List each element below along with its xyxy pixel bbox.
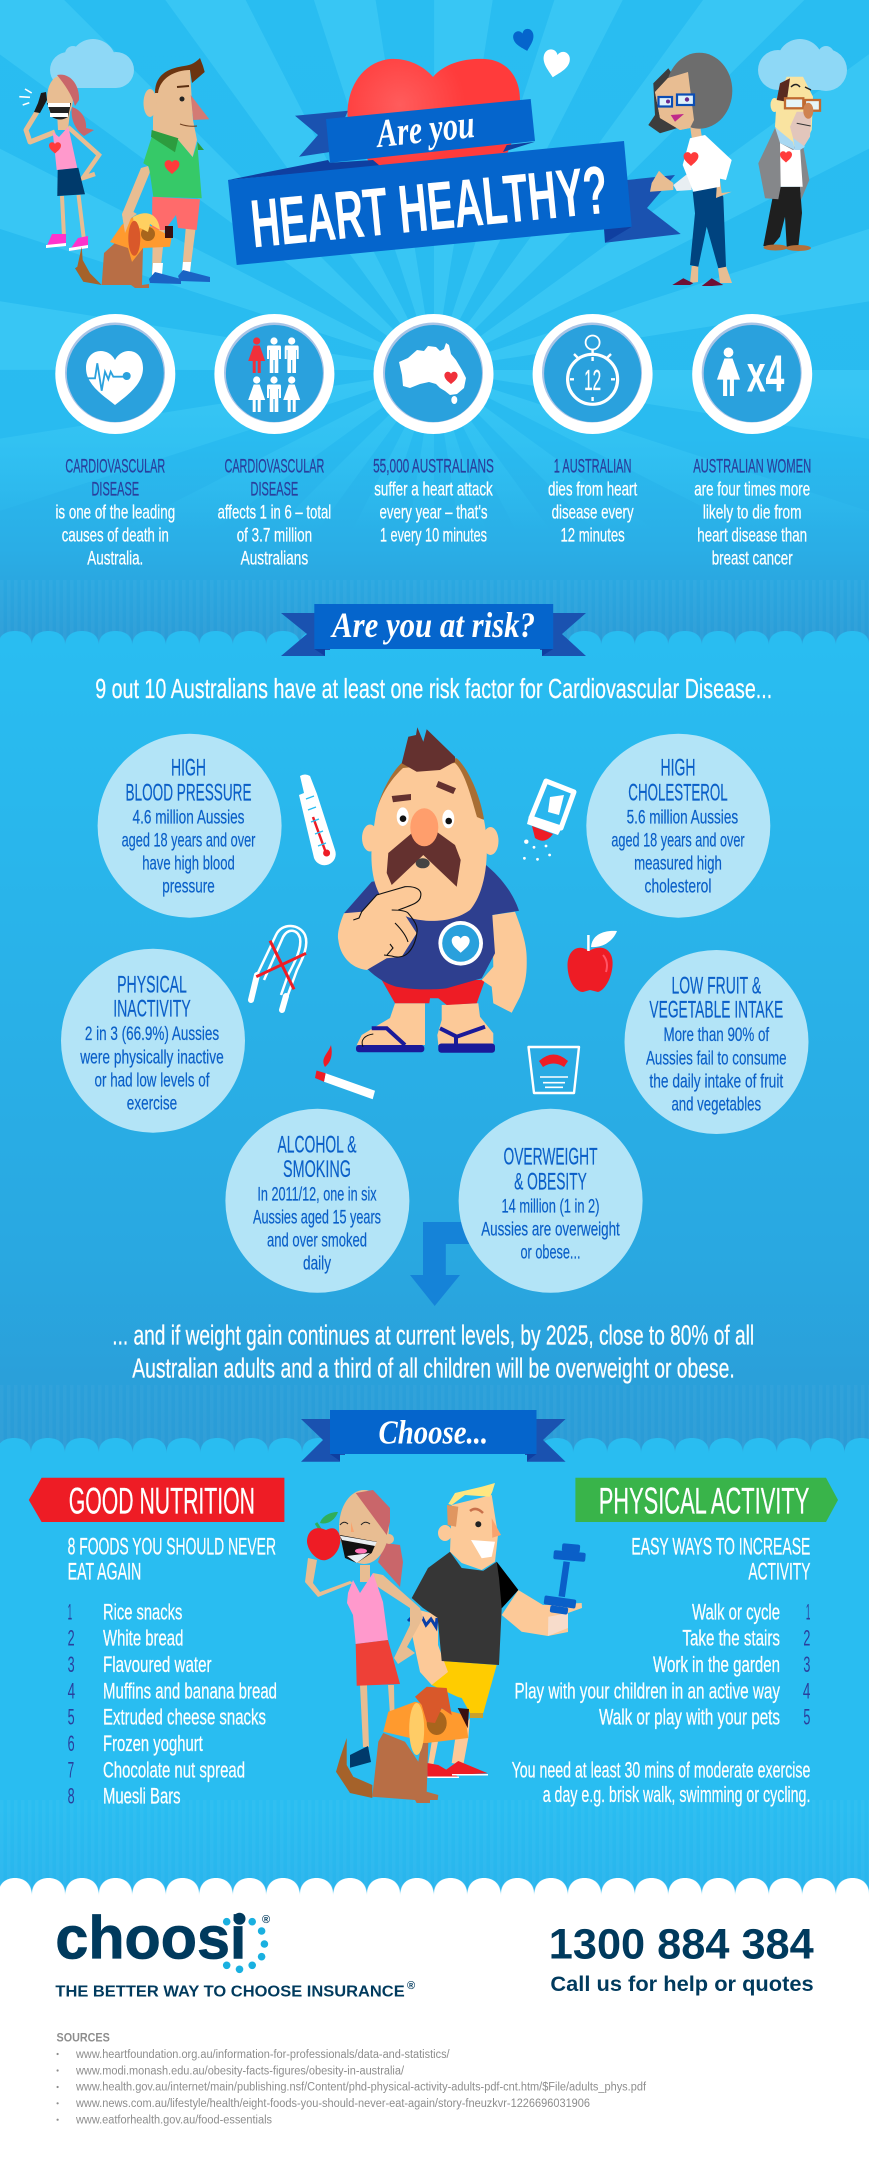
sources list — [56, 2049, 647, 2127]
stat text: CARDIOVASCULAR — [65, 455, 165, 477]
icon: woman x4 — [692, 314, 812, 434]
sources list: www.eatforhealth.gov.au/food-essentials — [75, 2115, 272, 2127]
icon: heart with pulse — [55, 314, 175, 434]
banner: good nutrition — [29, 1478, 284, 1522]
stat text: disease every — [552, 501, 634, 523]
icon: woman x4: x4 — [747, 346, 784, 404]
stat text: likely to die from — [703, 501, 802, 523]
risk bubble: low fruit and vegetable intake: More than 90% of — [663, 1024, 770, 1046]
nutrition list: Muesli Bars — [103, 1784, 181, 1809]
risk bubble: high blood pressure: aged 18 years and over — [122, 830, 256, 852]
risk bubble: physical inactivity: were physically inactive — [80, 1046, 224, 1068]
nutrition list: 2 — [68, 1626, 75, 1651]
cloud right — [758, 39, 847, 91]
risk bubble: alcohol and smoking: ALCOHOL & — [278, 1131, 356, 1158]
activity list: 2 — [803, 1626, 810, 1651]
title: heart healthy: HEART HEALTHY? — [247, 152, 611, 262]
ribbon: are you — [326, 99, 535, 163]
risk bubble: physical inactivity — [61, 949, 245, 1133]
ribbon heading: choose — [301, 1410, 566, 1462]
title hearts and ribbons — [228, 59, 681, 265]
stat text: heart disease than — [697, 524, 807, 546]
big red heart — [347, 59, 520, 178]
icon: cigarette — [315, 1045, 375, 1099]
weight gain statement — [112, 1319, 754, 1384]
character: woman with glasses — [648, 53, 732, 286]
background: header section — [0, 0, 869, 770]
risk bubble: high cholesterol: HIGH — [660, 755, 696, 782]
risk bubble: alcohol and smoking — [225, 1109, 409, 1293]
activity list: 3 — [803, 1652, 810, 1677]
nutrition list: 5 — [68, 1705, 75, 1730]
risk bubble: overweight and obesity: Aussies are overweight — [481, 1219, 620, 1241]
icon: stopwatch — [533, 314, 653, 434]
text: 1 — [806, 1599, 810, 1624]
stat text — [693, 455, 811, 569]
stat text: breast cancer — [712, 547, 793, 569]
icon: weighing scale — [528, 1047, 579, 1093]
risk bubble: overweight and obesity: 14 million (1 in 2) — [502, 1196, 600, 1218]
stat text: every year – that's — [380, 501, 488, 523]
stat text: 1 AUSTRALIAN — [554, 455, 631, 477]
risk bubble: low fruit and vegetable intake: and vegetables — [671, 1093, 761, 1115]
risk bubble: high blood pressure: BLOOD PRESSURE — [126, 779, 252, 806]
icon: salt shaker — [523, 781, 574, 861]
nutrition list: 1 — [68, 1599, 72, 1624]
risk bubble: high cholesterol: cholesterol — [645, 876, 711, 898]
arrow: down from risk factors — [410, 1222, 480, 1306]
nutrition list — [68, 1599, 277, 1809]
sources list: www.modi.monash.edu.au/obesity-facts-figures/obesity-in-australia/ — [75, 2065, 405, 2077]
risk bubble: high blood pressure: pressure — [162, 876, 215, 898]
activity list: Work in the garden — [653, 1652, 780, 1677]
stat text — [218, 455, 331, 569]
risk bubble: high cholesterol: 5.6 million Aussies — [627, 806, 738, 828]
nutrition list: Rice snacks — [103, 1599, 182, 1624]
stat panel: 55,000 heart attacks — [373, 314, 494, 546]
background: choose section — [0, 1438, 869, 1898]
stat text: of 3.7 million — [237, 524, 312, 546]
stat text: causes of death in — [62, 524, 169, 546]
sources heading: SOURCES — [56, 2033, 110, 2045]
icon: six people — [214, 314, 334, 434]
risk bubble: low fruit and vegetable intake: Aussies fail to consume — [646, 1047, 787, 1069]
ribbon heading: are you at risk — [281, 604, 586, 656]
nutrition list: 8 — [68, 1784, 75, 1809]
stat text: are four times more — [694, 478, 810, 500]
stat text: dies from heart — [548, 478, 638, 500]
risk bubble: alcohol and smoking: SMOKING — [283, 1156, 351, 1183]
ribbon fold: main left — [228, 160, 380, 180]
character: dog at man's side — [75, 210, 173, 288]
activity heading — [631, 1534, 810, 1585]
character: older man — [758, 77, 820, 251]
risk bubble: low fruit and vegetable intake: the daily intake of fruit — [649, 1071, 784, 1093]
character: girl on phone — [19, 75, 99, 251]
icon: skipping rope crossed out — [251, 926, 306, 1010]
icon: apple — [568, 931, 617, 992]
nutrition list: Flavoured water — [103, 1652, 212, 1677]
risk bubble: high cholesterol — [586, 734, 770, 918]
activity list: Walk or play with your pets — [599, 1705, 780, 1730]
icon: white heart — [540, 48, 571, 80]
risk bubble: alcohol and smoking: In 2011/12, one in six — [257, 1184, 377, 1206]
risk bubble: physical inactivity: PHYSICAL — [117, 971, 187, 998]
risk bubble: low fruit and vegetable intake: LOW FRUIT & — [671, 972, 761, 999]
footer background — [0, 1878, 869, 2171]
title: are you: Are you — [372, 101, 477, 156]
risk bubble: high blood pressure: have high blood — [142, 852, 235, 874]
nutrition list: Chocolate nut spread — [103, 1757, 245, 1782]
icon: australia map with heart — [374, 314, 494, 434]
activity list: 5 — [803, 1705, 810, 1730]
cloud left — [50, 39, 134, 88]
stat text — [548, 455, 638, 546]
risk bubble: alcohol and smoking: daily — [303, 1253, 331, 1275]
stat text: CARDIOVASCULAR — [224, 455, 324, 477]
stat text: Australia. — [87, 547, 143, 569]
icon: stopwatch: 12 — [584, 365, 601, 397]
logo: choosi: ® — [262, 1914, 270, 1926]
stat panel: 1 in 6 affected — [214, 314, 334, 569]
risk bubble: high blood pressure — [98, 734, 282, 918]
stat panel: cardiovascular disease leading cause — [55, 314, 175, 569]
risk bubble: overweight and obesity: or obese... — [520, 1242, 580, 1264]
risk bubble: high cholesterol: CHOLESTEROL — [628, 779, 728, 806]
ribbon tail: main right — [604, 175, 681, 243]
stat text: 55,000 AUSTRALIANS — [373, 455, 494, 477]
sources list: www.news.com.au/lifestyle/health/eight-foods-you-should-never-eat-again/story-fneuzkvr-1226696031906 — [75, 2098, 590, 2110]
risk bubble: high blood pressure: 4.6 million Aussies — [132, 806, 245, 828]
stat text: DISEASE — [91, 478, 139, 500]
risk bubble: overweight and obesity: & OBESITY — [514, 1168, 587, 1195]
nutrition heading: EAT AGAIN — [68, 1558, 141, 1585]
nutrition list: 6 — [68, 1731, 75, 1756]
character: dog in front — [336, 1687, 469, 1803]
activity list: Walk or cycle — [692, 1599, 780, 1624]
activity list: Take the stairs — [682, 1626, 780, 1651]
risk bubble: physical inactivity: 2 in 3 (66.9%) Aussies — [85, 1023, 219, 1045]
icon: thermometer — [299, 774, 336, 865]
ribbon fold: main right — [604, 227, 632, 243]
risk bubble: alcohol and smoking: Aussies aged 15 years — [253, 1207, 381, 1229]
logo tagline: ® — [407, 1980, 415, 1992]
character: thinking man with moustache — [338, 727, 527, 1053]
character: girl with apple — [305, 1490, 423, 1768]
risk bubble: high cholesterol: measured high — [634, 852, 722, 874]
character: man with dumbbell — [408, 1483, 586, 1778]
ribbon tail: are you left — [295, 111, 348, 157]
badge on shirt — [438, 921, 483, 966]
risk bubble: physical inactivity: exercise — [127, 1092, 177, 1114]
stat panel: women four times more likely — [692, 314, 812, 569]
phone number: 1300 884 384 — [549, 1921, 814, 1968]
nutrition list: Frozen yoghurt — [103, 1731, 203, 1756]
banner: good nutrition: GOOD NUTRITION — [69, 1480, 255, 1521]
call us: Call us for help or quotes — [550, 1973, 814, 1996]
nutrition list: 3 — [68, 1652, 75, 1677]
risk bubble: high blood pressure: HIGH — [171, 755, 206, 782]
character: man with green shirt — [122, 58, 210, 284]
risk bubble: overweight and obesity — [459, 1109, 643, 1293]
sources list: www.heartfoundation.org.au/information-for-professionals/data-and-statistics/ — [75, 2049, 450, 2061]
nutrition list: White bread — [103, 1626, 183, 1651]
risk bubble: physical inactivity: or had low levels of — [95, 1069, 210, 1091]
nutrition list: Muffins and banana bread — [103, 1678, 277, 1703]
stat text: is one of the leading — [55, 501, 175, 523]
stat text: Australians — [241, 547, 308, 569]
stat text: affects 1 in 6 – total — [218, 501, 331, 523]
exercise note — [512, 1757, 810, 1807]
stat text: suffer a heart attack — [374, 478, 493, 500]
activity list: 4 — [803, 1678, 810, 1703]
logo tagline: THE BETTER WAY TO CHOOSE INSURANCE — [55, 1984, 405, 2001]
nutrition list: 7 — [68, 1757, 74, 1782]
activity list — [514, 1599, 810, 1730]
nutrition list: 4 — [68, 1678, 75, 1703]
background: risk section — [0, 631, 869, 1455]
ribbon heading: choose: Choose... — [379, 1414, 488, 1451]
risk bubble: alcohol and smoking: and over smoked — [267, 1230, 367, 1252]
main ribbon — [228, 141, 632, 265]
stat text: DISEASE — [251, 478, 298, 500]
nutrition heading: 8 FOODS YOU SHOULD NEVER — [68, 1534, 276, 1561]
stat text: 1 every 10 minutes — [380, 524, 487, 546]
nutrition heading — [68, 1534, 276, 1585]
sources list: www.health.gov.au/internet/main/publishing.nsf/Content/phd-physical-activity-adults-pdf-cnt.htm/$File/adults_phys.pdf — [75, 2082, 647, 2094]
stat text — [55, 455, 175, 569]
risk bubble: overweight and obesity: OVERWEIGHT — [504, 1144, 598, 1171]
stat panel: 1 Australian every 12 minutes — [533, 314, 653, 546]
activity heading: ACTIVITY — [748, 1558, 810, 1585]
stat text — [373, 455, 494, 546]
risk bubble: low fruit and vegetable intake — [624, 950, 808, 1134]
logo: choosi: choosi — [55, 1904, 246, 1971]
risk bubble: physical inactivity: INACTIVITY — [113, 996, 191, 1023]
ribbon heading: are you at risk: Are you at risk? — [330, 605, 535, 645]
nutrition list: Extruded cheese snacks — [103, 1705, 266, 1730]
icon: blue heart — [512, 28, 537, 54]
ribbon fold right — [503, 142, 535, 152]
risk bubble: high cholesterol: aged 18 years and over — [611, 830, 745, 852]
stat text: 12 minutes — [560, 524, 625, 546]
